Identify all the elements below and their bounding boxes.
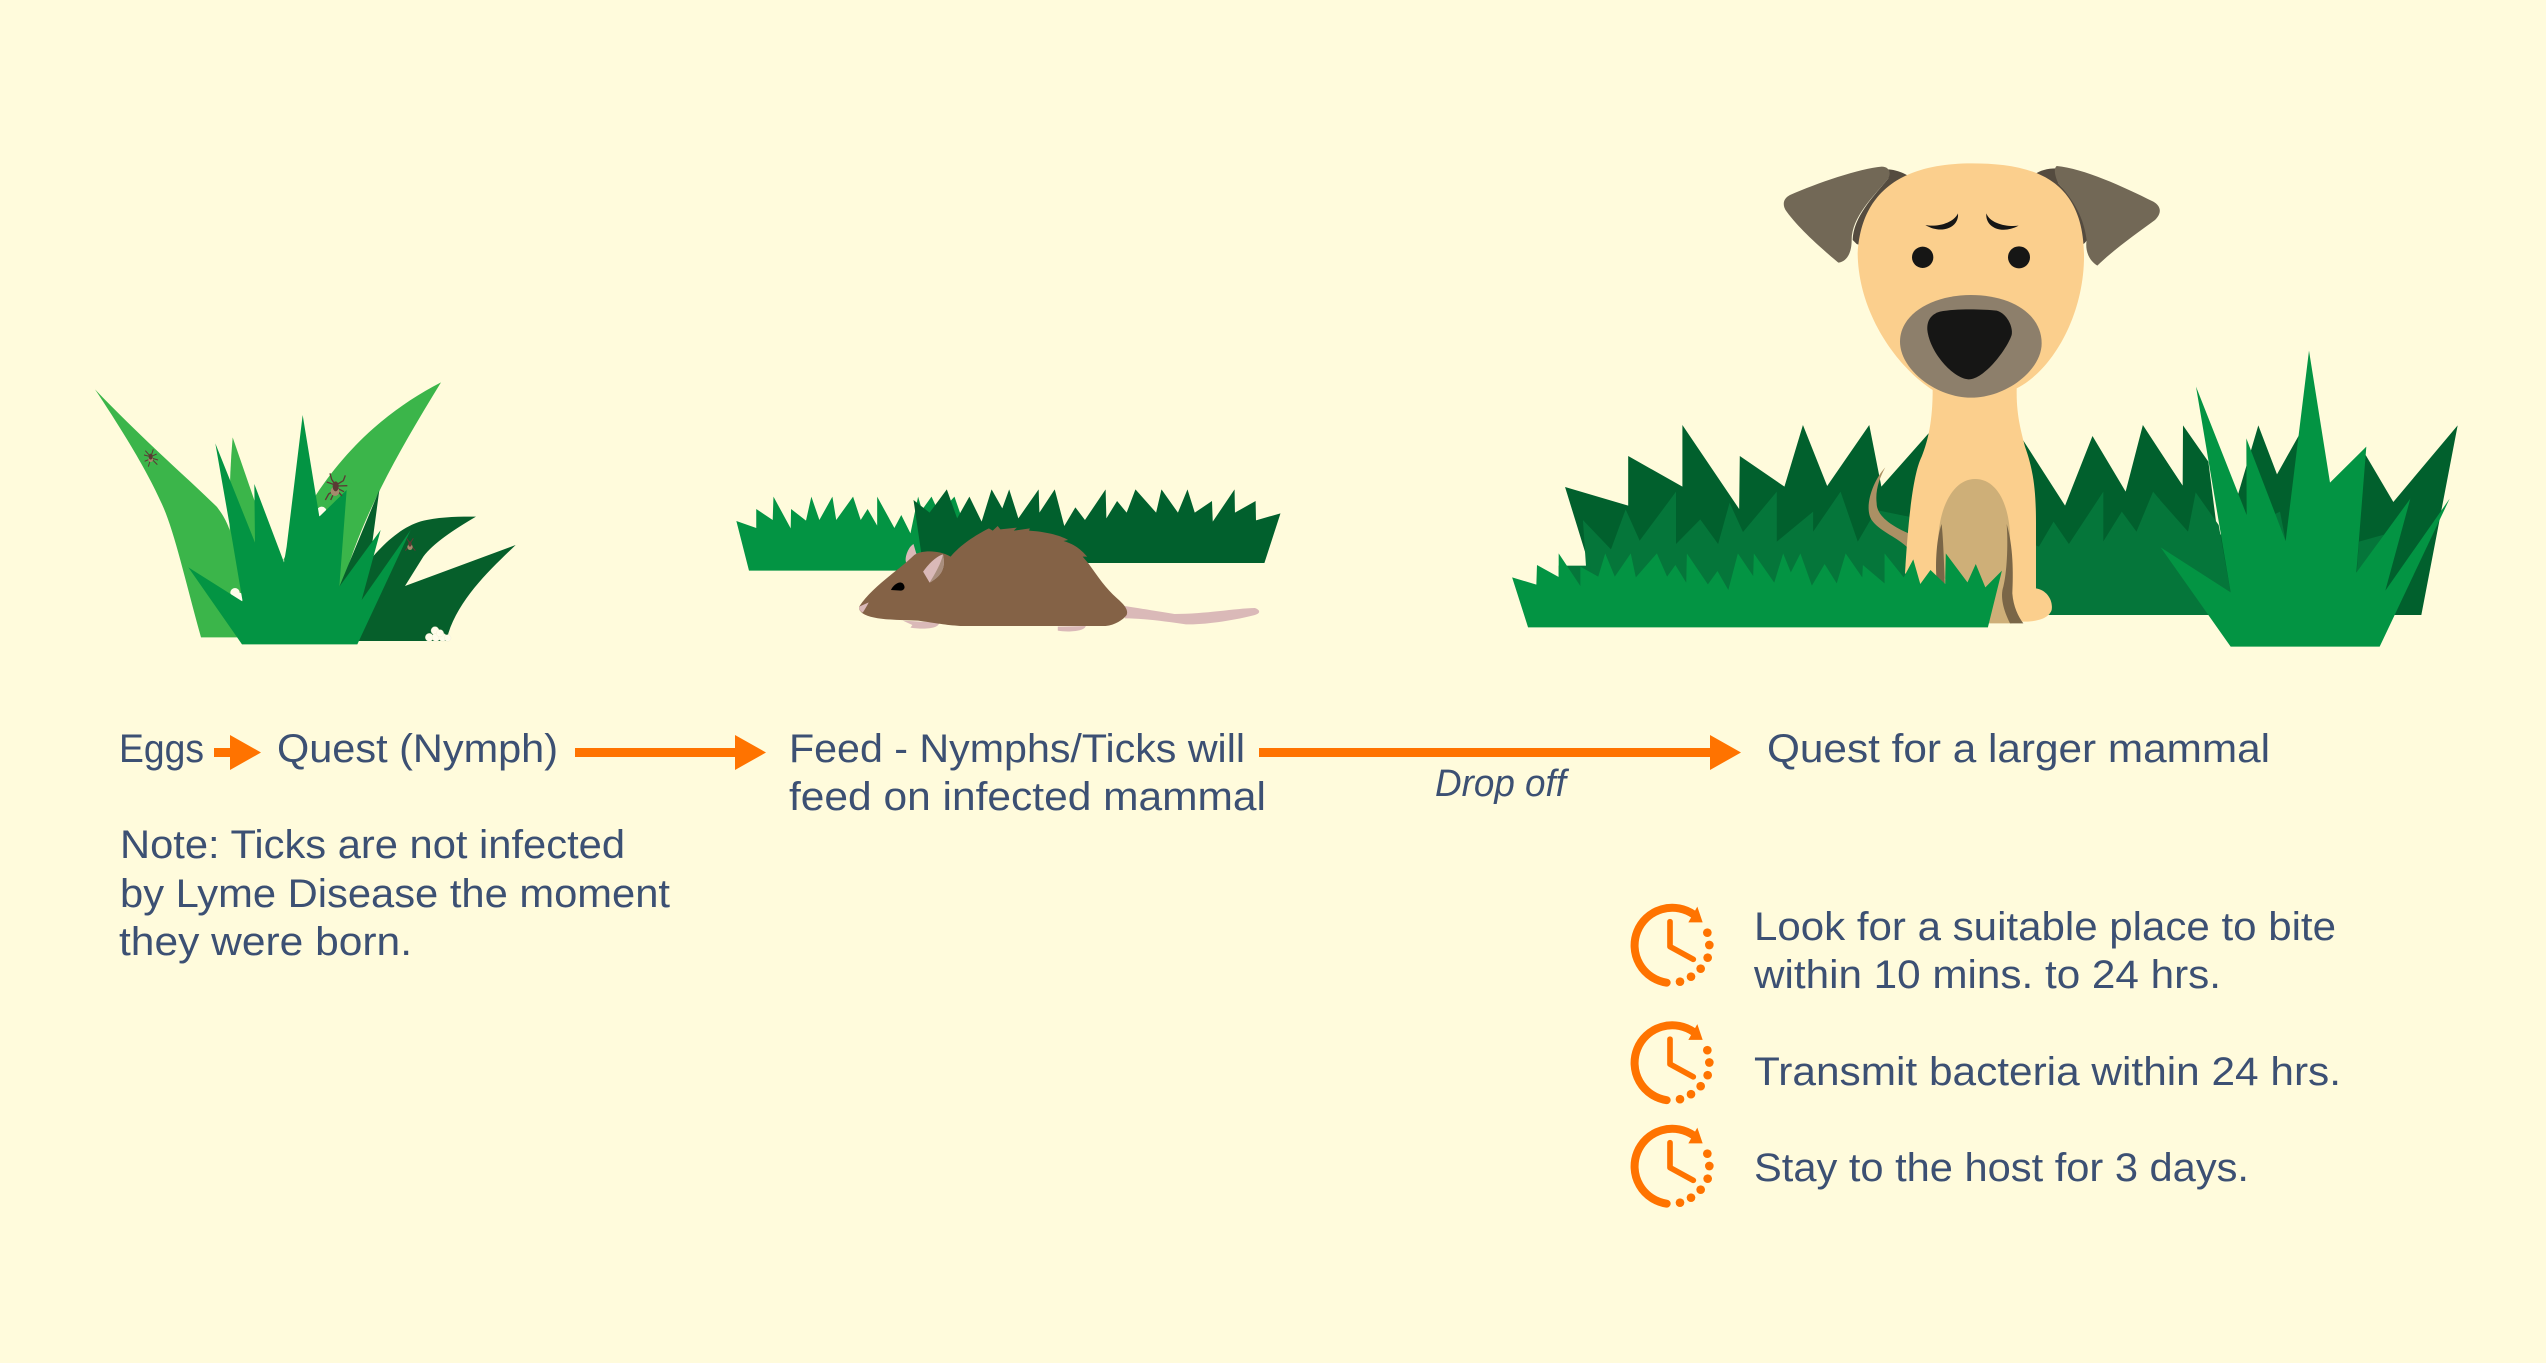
text block: note: Note: Ticks are not infected — [120, 823, 625, 867]
dog: muzzle — [1900, 295, 2042, 398]
dog: belly — [1938, 479, 2012, 623]
text block: feed — [789, 727, 1266, 819]
text: stay to the host: Stay to the host for 3 days. — [1754, 1146, 2249, 1190]
mouse: body — [859, 526, 1127, 626]
text block: note: they were born. — [119, 920, 412, 964]
eggs: cluster at base — [425, 627, 451, 641]
dog: eyes — [1912, 246, 2030, 268]
text block: feed: Feed - Nymphs/Ticks will — [789, 727, 1245, 771]
dog: leg lines — [1936, 524, 2023, 623]
dog: eyebrows — [1925, 213, 2019, 230]
eggs: behind the grass — [230, 507, 327, 602]
grass: front right clump — [2161, 351, 2450, 647]
illustration: front grass over the dog — [1512, 553, 2002, 627]
dog: right ear — [2055, 166, 2160, 266]
grass: dark green blades — [339, 490, 516, 641]
mouse: nose — [859, 602, 869, 613]
illustration: back grass behind the dog — [1559, 425, 2189, 615]
dog: nose — [1927, 309, 2012, 379]
grass: light green blades — [95, 382, 441, 637]
grass: middle layer right — [2160, 492, 2384, 615]
text block: note — [119, 823, 670, 964]
label: Eggs: Eggs — [119, 727, 204, 771]
icon: clock 1 — [1635, 907, 1714, 986]
text block: feed: feed on infected mammal — [789, 775, 1266, 819]
text block: note: by Lyme Disease the moment — [120, 872, 670, 916]
label: Quest for a larger mammal: Quest for a larger mammal — [1767, 727, 2270, 771]
tick: large on right blade — [325, 473, 347, 500]
grass: front left clump — [1512, 553, 2002, 627]
arrow: quest to feed — [575, 735, 766, 770]
grass: darkest layer right — [2160, 425, 2458, 615]
tick: small on left blade — [144, 449, 158, 467]
illustration: back grass on the right — [2160, 425, 2458, 615]
label: Drop off: Drop off — [1435, 763, 1569, 805]
mouse: feet — [903, 621, 1086, 631]
text: transmit bacteria: Transmit bacteria within 24 hrs. — [1754, 1050, 2341, 1094]
mouse: tail — [1125, 606, 1259, 624]
grass: mid green — [736, 497, 970, 571]
tick: small on dark blade — [405, 538, 415, 551]
mouse: back ear — [906, 544, 920, 567]
mouse: front ear — [923, 554, 944, 583]
illustration: sad dog — [1784, 163, 2160, 623]
icon: clock 2 — [1635, 1024, 1714, 1103]
dog: inner ears — [1853, 168, 2087, 250]
text block: look for a place to bite: within 10 mins. to 24 hrs. — [1753, 953, 2221, 997]
grass: middle layer — [1559, 492, 2189, 615]
grass: dark green — [914, 489, 1280, 563]
illustration: eggs and nymph grass clump — [95, 382, 516, 644]
text block: look for a place to bite — [1753, 905, 2336, 997]
icon: clock 3 — [1635, 1128, 1714, 1207]
dog: head and body — [1858, 163, 2084, 622]
label: Quest (Nymph): Quest (Nymph) — [277, 727, 558, 771]
arrow: feed to quest for a larger mammal — [1259, 735, 1741, 770]
dog: tail — [1869, 467, 1908, 548]
mouse: eye — [891, 583, 905, 591]
grass: mid green blades — [188, 415, 411, 644]
grass: darkest layer — [1565, 425, 2186, 615]
illustration: mouse in grass — [736, 489, 1280, 631]
arrow: eggs to quest — [214, 735, 261, 770]
dog: left ear — [1784, 167, 1890, 263]
text block: look for a place to bite: Look for a suitable place to bite — [1754, 905, 2336, 949]
